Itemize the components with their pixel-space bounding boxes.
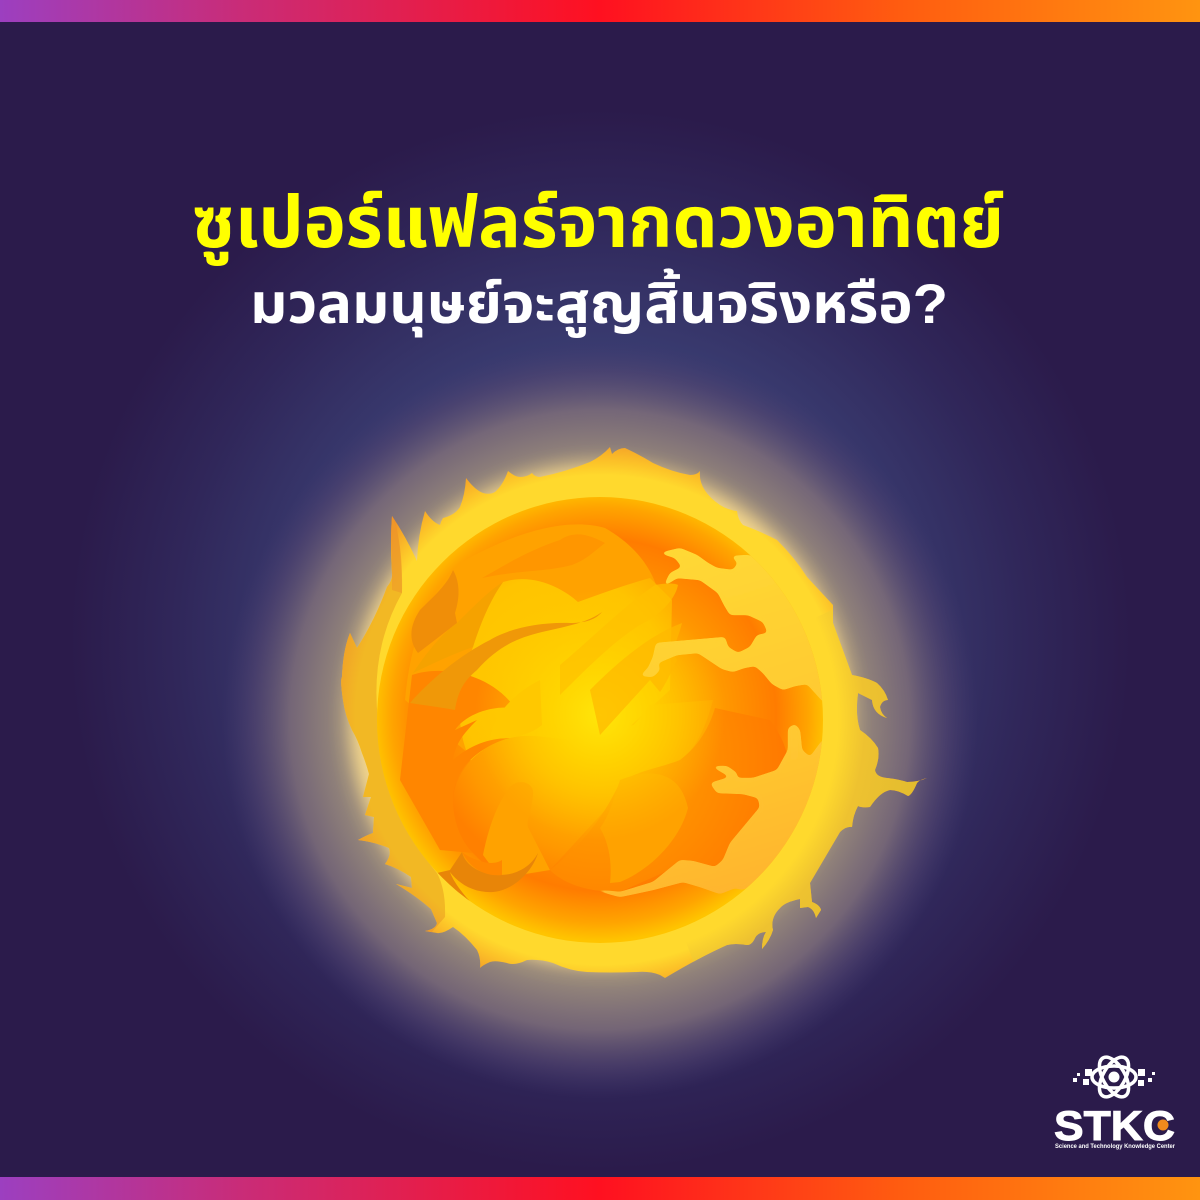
- illustration: sun: [341, 447, 927, 978]
- title: ซูเปอร์แฟลร์จากดวงอาทิตย์: [192, 183, 1004, 266]
- diagonal yellow band: [638, 708, 651, 722]
- right orange lobe: [550, 708, 788, 892]
- upper dark flame: [482, 534, 605, 578]
- S shaped flame: [483, 782, 550, 878]
- dark tongue flame: [411, 570, 459, 653]
- logo: STKC: [1054, 1052, 1176, 1150]
- curl highlight: [462, 852, 502, 875]
- main right flame upper: [640, 548, 826, 705]
- surface flames: [400, 524, 826, 909]
- lower curl crescent: [438, 852, 538, 901]
- sweeping wisp: [410, 612, 602, 710]
- icon: atom: [1073, 1052, 1155, 1102]
- sun corona silhouette: [341, 447, 927, 978]
- top gradient bar: [0, 0, 1200, 22]
- subtitle: มวลมนุษย์จะสูญสิ้นจริงหรือ?: [250, 267, 948, 338]
- logo wordmark: STKC: [1054, 1102, 1175, 1149]
- amber tongue flame: [413, 582, 503, 673]
- logo tagline: Science and Technology Knowledge Center: [1055, 1144, 1176, 1150]
- gold streak one: [560, 584, 678, 695]
- logo orange dot: [1158, 1120, 1168, 1130]
- gold lens: [502, 687, 542, 738]
- main right flame lower: [600, 725, 822, 897]
- bottom gradient bar: [0, 1177, 1200, 1200]
- gold streak two: [590, 623, 682, 735]
- left orange lobe: [400, 671, 515, 853]
- sun disc: [377, 497, 823, 943]
- central glow: [488, 654, 711, 822]
- sun glow halo: [222, 342, 978, 1098]
- lower left lobe: [466, 736, 586, 862]
- inner right lobe: [600, 773, 688, 883]
- upper orange mass: [405, 524, 656, 750]
- gold blob: [460, 578, 672, 760]
